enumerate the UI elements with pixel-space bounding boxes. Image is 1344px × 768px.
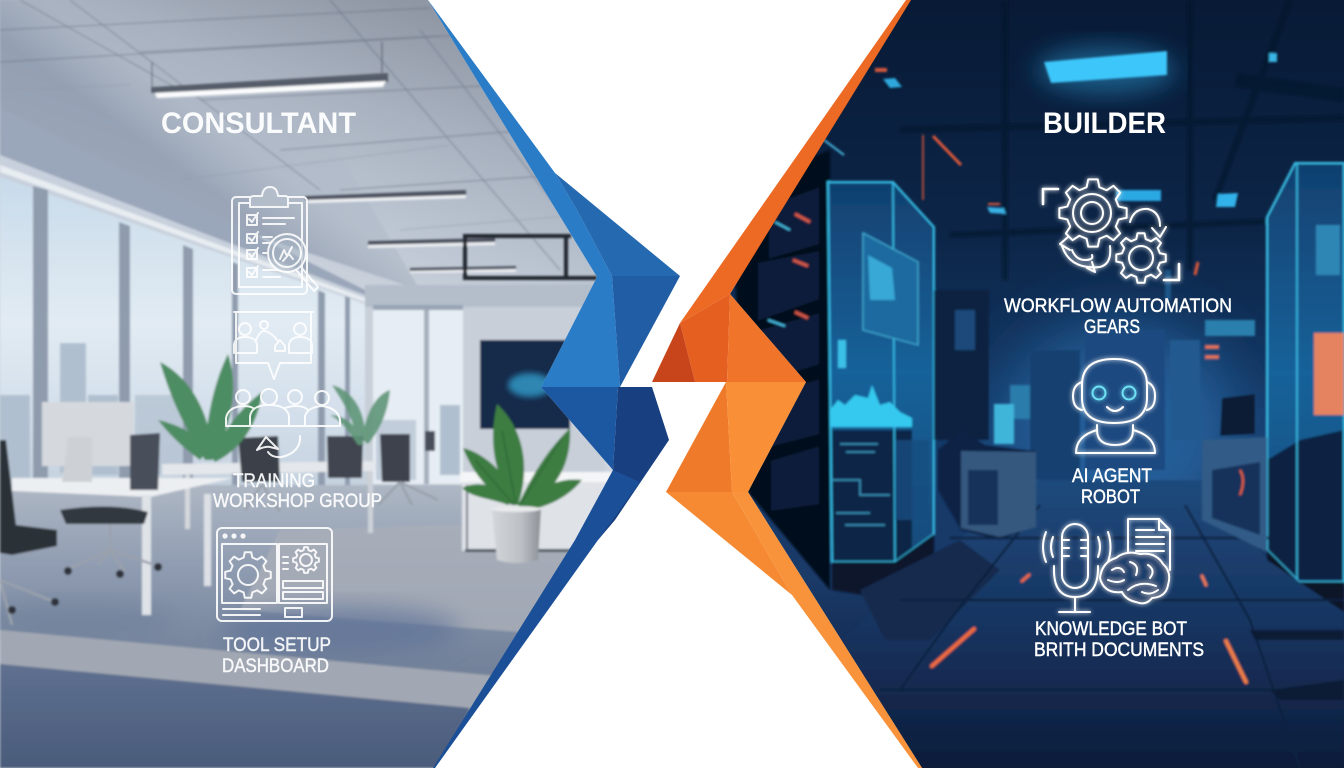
label: workflow automation gears: WORKFLOW AUTOMATION	[1004, 295, 1232, 317]
floor	[0, 484, 566, 721]
heading: consultant: CONSULTANT	[161, 107, 356, 140]
label: knowledge bot: KNOWLEDGE BOT	[1035, 618, 1187, 640]
wall screen	[480, 340, 570, 429]
label: tool setup dashboard: DASHBOARD	[222, 655, 329, 677]
sideboard	[462, 480, 612, 551]
label: ai agent robot	[1072, 465, 1152, 508]
left glass cabinet	[828, 182, 934, 562]
label: training workshop group: WORKSHOP GROUP	[213, 490, 382, 512]
floor	[840, 480, 1344, 768]
label: ai agent robot: AI AGENT	[1072, 465, 1152, 487]
label: training workshop group	[213, 470, 382, 512]
label: knowledge bot	[1034, 618, 1204, 661]
label: training workshop group: TRAINING	[233, 470, 315, 492]
consoles	[938, 430, 1036, 540]
panel: blue angular divider	[428, 0, 680, 768]
heading: builder: BUILDER	[1043, 107, 1166, 140]
icon: ai agent robot	[1073, 359, 1155, 453]
label: tool setup dashboard	[222, 634, 331, 677]
label: ai agent robot: ROBOT	[1081, 486, 1140, 508]
panel: builder server room background	[720, 0, 1344, 768]
panel: orange angular divider	[652, 0, 922, 768]
icon: workshop group	[226, 389, 340, 457]
skyline	[0, 343, 460, 485]
icon: training presentation board	[234, 312, 313, 379]
icon: knowledge bot microphone, brain, document	[1043, 519, 1170, 612]
plants	[158, 354, 262, 462]
icon: workflow automation gears	[1043, 179, 1179, 283]
icon: clipboard with magnifier	[232, 187, 318, 294]
left rack	[730, 150, 830, 590]
floor dashes	[932, 575, 1246, 682]
label: workflow automation gears: GEARS	[1084, 316, 1140, 338]
label: workflow automation gears	[1004, 295, 1232, 338]
label: knowledge bot: BRITH DOCUMENTS	[1034, 639, 1204, 661]
panel: consultant office background	[0, 0, 620, 768]
right glass cabinet	[1267, 163, 1344, 582]
desks	[204, 494, 211, 586]
icon: tool setup dashboard	[217, 528, 332, 621]
ceiling lights	[1036, 46, 1176, 94]
center racks	[934, 290, 989, 440]
label: tool setup dashboard: TOOL SETUP	[223, 634, 331, 656]
chairs	[0, 440, 57, 555]
